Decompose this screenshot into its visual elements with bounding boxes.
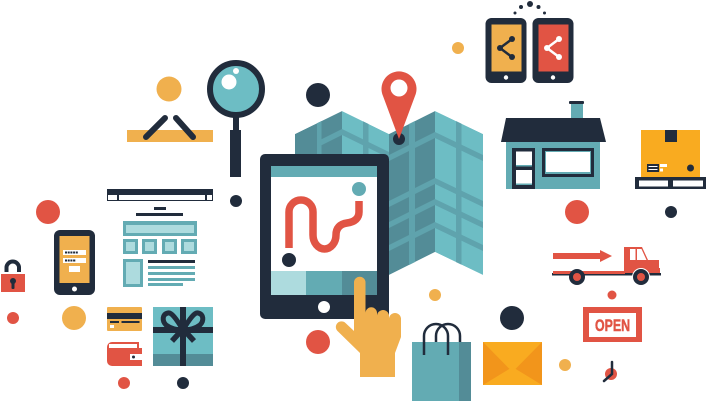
decorative dots centre and right (306, 42, 677, 371)
dot above map (306, 83, 330, 107)
icon: parcel on pallet (635, 130, 706, 189)
icon: sun and tent on ground (127, 76, 213, 142)
icon: envelope (483, 342, 542, 385)
icon: open sign (583, 307, 642, 342)
icon: wallet (107, 342, 142, 366)
icon: pointing hand (336, 277, 401, 377)
icon: shopping bag (412, 324, 471, 401)
icon: magnifying glass (210, 63, 262, 177)
icon: sharing phones (486, 1, 574, 83)
icon: gift box (153, 307, 213, 366)
icon: credit card (107, 307, 142, 331)
icon: location pin (381, 71, 416, 145)
icon: open sign: OPEN (595, 317, 630, 335)
icon: house (501, 101, 606, 189)
folded map (295, 105, 483, 275)
icon: padlock (1, 261, 25, 292)
decorative dots left (7, 195, 242, 389)
icon: delivery truck (552, 247, 661, 286)
icon: clock (604, 362, 617, 381)
icon: web page wireframe (107, 189, 213, 287)
icon: phone login (54, 230, 95, 295)
tablet with route map (260, 154, 389, 319)
